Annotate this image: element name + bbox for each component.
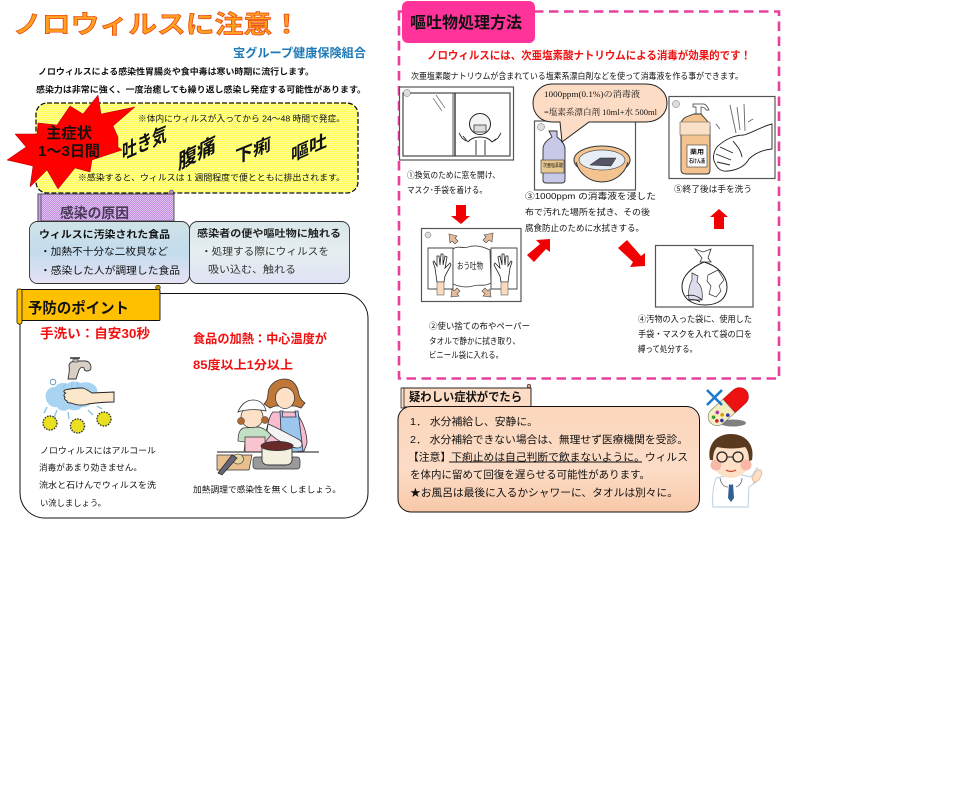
step 2 picture: wipe up vomit: おう吐物 [457,260,483,271]
panel: contaminated food: ・加熱不十分な二枚貝など [40,245,168,258]
incubation note: ※体内にウィルスが入ってから 24～48 時間で発症。 [138,114,345,124]
text: hand washing advice: い流しましょう。 [40,498,106,508]
step 1 picture: open window [400,87,514,160]
starburst: main symptoms duration: 主症状 [46,124,92,142]
title: ノロウィルスに注意！ [13,11,301,39]
step 5 picture: wash hands [669,96,775,178]
step 2 text: タオルで静かに拭き取り、 [429,336,520,346]
panel: contact with waste: 感染者の便や嘔吐物に触れる [197,227,341,240]
heading: hand washing: 手洗い：自安30秒 [40,326,150,341]
text: heating advice: 加熱調理で感染性を無くしましょう。 [193,484,341,494]
heading: heating food [193,331,327,372]
starburst: main symptoms duration: 1～3日間 [38,143,100,160]
arrow: step 4 to 5 [710,209,728,229]
icon: doctor [709,434,762,507]
shedding note: ※感染すると、ウィルスは 1 週間程度で便とともに排出されます。 [78,172,345,182]
banner: causes of infection: 感染の原因 [60,205,129,221]
starburst: main symptoms duration [7,95,135,189]
step 3 text [525,191,656,233]
step 4 text: 手袋・マスクを入れて袋の口を [638,329,752,339]
symptom word: vomiting: 嘔吐 [291,130,327,166]
step 4 text: 縛って処分する。 [638,344,697,354]
panel: vomit disposal method [399,1,779,378]
symptom word: diarrhea: 下痢 [235,133,271,168]
intro text: ノロウィルスによる感染性胃腸炎や食中毒は寒い時期に流行します。 [38,66,314,76]
callout: bleach dilution: 1000ppm(0.1%)の消毒液 [544,89,641,99]
step 3 picture: bleach and basin [534,121,636,190]
panel: contaminated food: ウィルスに汚染された食品 [39,228,170,241]
step 1 text: マスク･手袋を着ける。 [407,185,487,195]
callout: bleach dilution [533,84,667,142]
panel: contaminated food: ・感染した人が調理した食品 [40,264,180,277]
icon: hand washing [43,358,114,433]
step 1 text [407,170,500,195]
organisation name: 宝グループ健康保険組合 [233,45,366,60]
step 3 picture: bleach and basin: 次亜塩素酸 [543,162,563,169]
panel: what to do [398,406,700,512]
panel: what to do: 【注意】下痢止めは自己判断で飲まないように。ウィルス [408,450,688,464]
text: hand washing advice: 消毒があまり効きません。 [39,462,142,472]
heading: heating food: 食品の加熱：中心温度が [193,331,327,346]
step 3 text: 腐食防止のために水拭きする。 [525,223,644,233]
panel: main symptoms [36,103,358,193]
intro text [36,66,366,94]
panel: what to do: を体内に留めて回復を遅らせる可能性があります。 [410,468,650,481]
step 2 text [429,321,530,360]
banner: if symptoms appear: 疑わしい症状がでたら [409,389,522,404]
banner: prevention points: 予防のポイント [28,299,129,317]
symptom word: nausea: 吐き気 [122,121,167,164]
arrow: step 3 to 4 [618,240,645,267]
intro text: 感染力は非常に強く、一度治癒しても繰り返し感染し発症する可能性があります。 [36,84,366,94]
step 2 text: ビニール袋に入れる。 [429,350,503,360]
text: hand washing advice: ノロウィルスにはアルコール [40,446,157,456]
step 2 text: ②使い捨ての布やペーパー [429,321,530,331]
text: hand washing advice [39,446,157,508]
panel: contact with waste [190,222,350,284]
heading: heating food: 85度以上1分以上 [193,357,293,372]
panel: what to do: 2． 水分補給できない場合は、無理せず医療機関を受診。 [410,433,688,446]
step 5 text: ⑤終了後は手を洗う [674,184,752,194]
text: hand washing advice: 流水と石けんでウィルスを洗 [39,480,157,490]
icon: no medicine [704,384,752,429]
panel: prevention points [17,285,368,518]
panel: what to do: 1． 水分補給し、安静に。 [410,415,538,428]
heading: vomit disposal method [402,1,535,43]
panel: contact with waste: 吸い込む、触れる [208,263,296,276]
intro line: 次亜塩素酸ナトリウムが含まれている塩素系漂白剤などを使って消毒液を作る事ができます。 [411,71,743,81]
banner: prevention points [17,285,160,324]
banner: causes of infection [38,190,174,224]
step 1 text: ①換気のために窓を開け、 [407,170,500,180]
illustration: cooking together [217,379,319,475]
panel: contact with waste: ・処理する際にウィルスを [201,245,329,258]
banner: if symptoms appear [401,384,531,408]
step 4 picture: tied bag [656,246,753,307]
symptom word: stomach ache: 腹痛 [178,132,216,175]
callout: bleach dilution: =塩素系漂白剤 10ml+水 500ml [544,107,658,117]
step 3 text: ③1000ppm の消毒液を浸した [525,191,656,201]
step 4 text: ④汚物の入った袋に、使用した [638,314,752,324]
step 5 picture: wash hands: 石けん液 [689,157,705,165]
arrow: step 1 to 2 [451,205,470,224]
panel: contaminated food [30,222,190,284]
panel: what to do: ★お風呂は最後に入るかシャワーに、タオルは別々に。 [410,486,678,499]
heading: vomit disposal method: 嘔吐物処理方法 [410,13,522,32]
subtitle: ノロウィルスには、次亜塩素酸ナトリウムによる消毒が効果的です！ [427,48,751,62]
step 2 picture: wipe up vomit [422,228,521,302]
step 3 text: 布で汚れた場所を拭き、その後 [525,207,651,217]
step 4 text [638,314,752,354]
arrow: step 2 to 3 [527,239,550,262]
step 5 picture: wash hands: 薬用 [690,148,704,156]
